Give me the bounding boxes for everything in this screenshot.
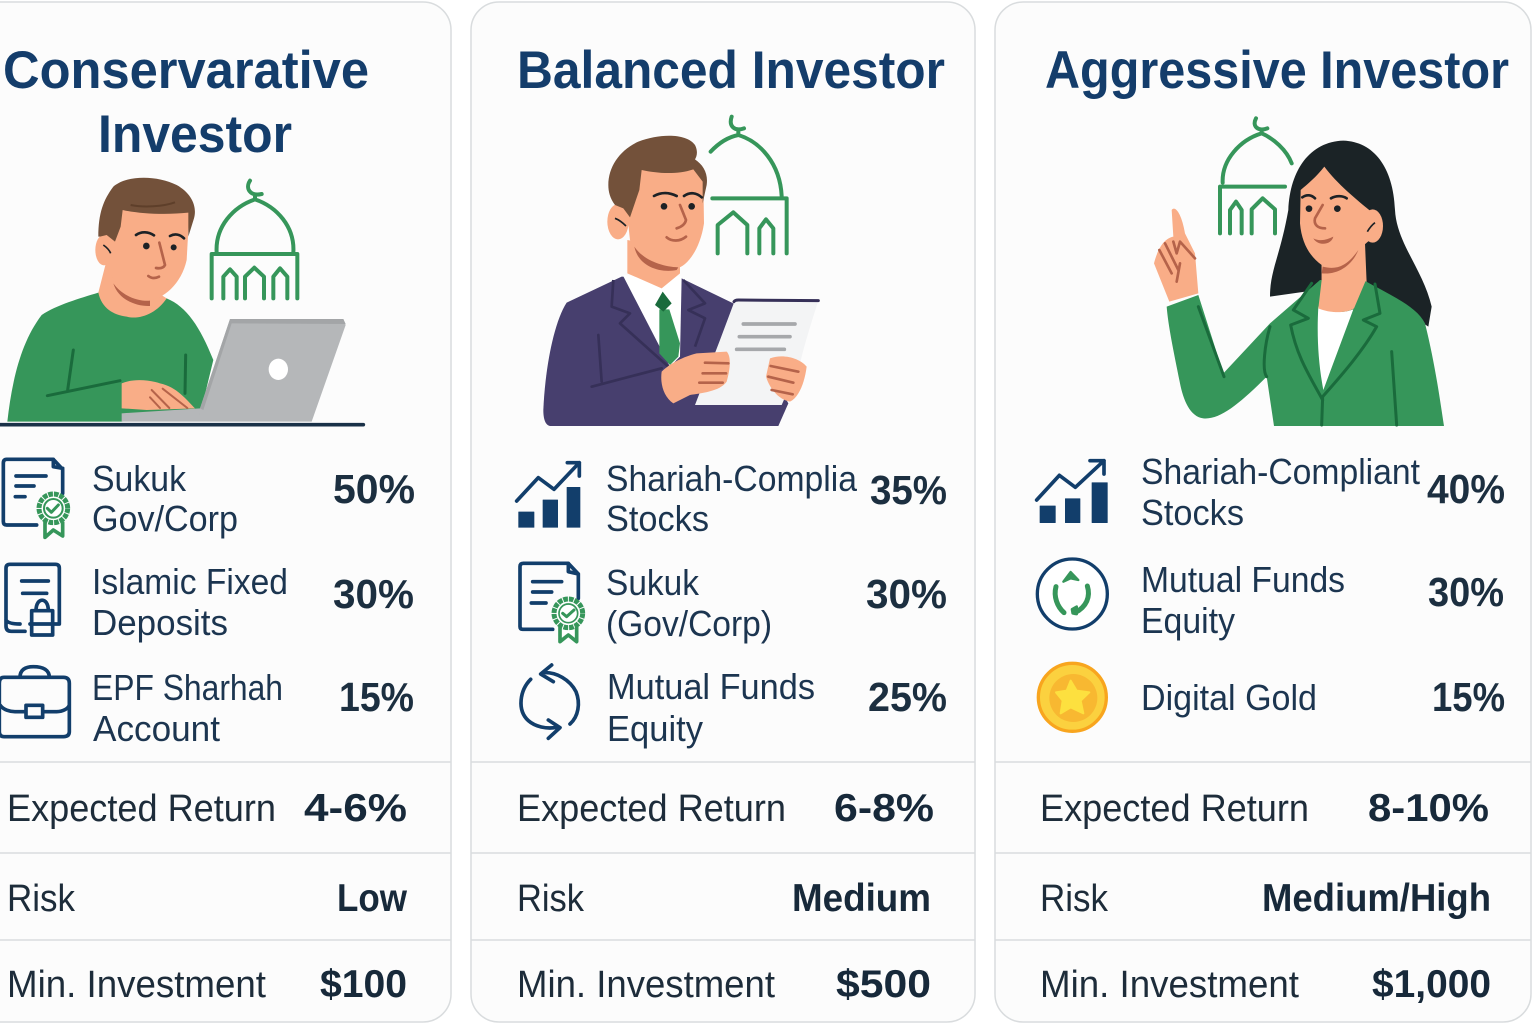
row: expected return	[517, 787, 934, 830]
icon: growth chart	[517, 463, 580, 527]
icon: refresh arrows	[521, 665, 578, 738]
label: digital gold: Digital Gold	[1141, 677, 1317, 718]
heading: conservative investor: Conservarative	[3, 41, 369, 100]
icon: growth chart	[1037, 461, 1107, 523]
label: islamic fixed deposits: Islamic Fixed	[92, 561, 288, 602]
row: risk: Medium/High	[1262, 877, 1491, 920]
row: risk	[1040, 877, 1491, 920]
label: mutual funds equity: Mutual Funds	[607, 666, 815, 707]
heading: balanced investor: Balanced Investor	[517, 41, 945, 100]
illustration: woman in green blazer pointing with mosque	[1154, 118, 1444, 426]
label: mutual funds equity: Equity	[1141, 600, 1235, 641]
icon: certified document	[3, 459, 68, 537]
label: shariah-compliant stocks: Stocks	[606, 498, 709, 539]
row: risk: Risk	[517, 878, 585, 920]
panel: aggressive investor	[995, 2, 1531, 1022]
value: 35%: 35%	[870, 467, 947, 513]
value: 40%: 40%	[1427, 466, 1505, 512]
heading: conservative investor	[3, 41, 369, 164]
icon: locked book	[6, 564, 59, 635]
row: min investment: Min. Investment	[517, 964, 775, 1006]
row: risk: Risk	[1040, 878, 1109, 920]
label: shariah-compliant stocks	[606, 458, 858, 539]
label: sukuk: Sukuk	[92, 458, 187, 499]
illustration: man in suit with document and mosque	[543, 117, 818, 426]
row: risk: Low	[337, 877, 408, 920]
value: 30%: 30%	[333, 571, 414, 617]
label: shariah-compliant stocks: Shariah-Compliant	[1141, 451, 1420, 492]
row: expected return: Expected Return	[517, 788, 786, 830]
allocation list	[517, 458, 947, 749]
label: sukuk gov corp: Sukuk	[606, 562, 700, 603]
label: shariah-compliant stocks: Stocks	[1141, 492, 1244, 533]
icon: circular recycle	[1037, 559, 1107, 629]
illustration: man at laptop with mosque	[0, 178, 363, 425]
icon: briefcase	[0, 667, 69, 737]
row: risk: Medium	[792, 877, 931, 920]
value: 15%: 15%	[339, 674, 414, 720]
row: expected return: Expected Return	[7, 788, 276, 830]
row: min investment	[7, 963, 407, 1006]
label: mutual funds equity	[1141, 559, 1345, 641]
allocation list	[0, 458, 415, 749]
heading: conservative investor: Investor	[98, 105, 292, 164]
allocation list	[1037, 451, 1505, 731]
label: epf shariah account: Account	[93, 708, 220, 749]
row: expected return: Expected Return	[1040, 788, 1309, 830]
value: 25%: 25%	[868, 674, 947, 720]
label: sukuk gov corp: (Gov/Corp)	[606, 603, 772, 644]
label: mutual funds equity: Equity	[607, 708, 703, 749]
row: risk: Risk	[7, 878, 76, 920]
row: min investment: $500	[836, 963, 931, 1006]
label: sukuk: Gov/Corp	[92, 498, 238, 539]
label: shariah-compliant stocks: Shariah-Complia	[606, 458, 858, 499]
row: min investment: $1,000	[1372, 963, 1491, 1006]
icon: certified document	[520, 563, 583, 642]
row: risk	[517, 877, 931, 920]
row: expected return	[1040, 787, 1489, 830]
value: 30%: 30%	[1428, 569, 1504, 615]
row: min investment: Min. Investment	[1040, 964, 1299, 1006]
row: min investment: Min. Investment	[7, 964, 266, 1006]
label: sukuk gov corp	[606, 562, 772, 644]
row: expected return: 8-10%	[1368, 787, 1489, 830]
value: 15%: 15%	[1432, 674, 1505, 720]
label: islamic fixed deposits: Deposits	[92, 602, 228, 643]
row: expected return: 6-8%	[834, 787, 934, 830]
label: mutual funds equity	[607, 666, 815, 749]
row: min investment	[1040, 963, 1491, 1006]
label: mutual funds equity: Mutual Funds	[1141, 559, 1345, 600]
row: expected return	[7, 787, 407, 830]
label: sukuk	[92, 458, 238, 539]
panel: balanced investor	[471, 2, 975, 1022]
label: epf shariah account: EPF Sharhah	[92, 667, 283, 708]
row: min investment: $100	[320, 963, 407, 1006]
label: epf shariah account	[92, 667, 283, 749]
label: shariah-compliant stocks	[1141, 451, 1420, 533]
value: 50%: 50%	[333, 466, 415, 512]
row: min investment	[517, 963, 931, 1006]
row: expected return: 4-6%	[304, 787, 407, 830]
icon: gold coin	[1038, 663, 1106, 731]
label: islamic fixed deposits	[92, 561, 288, 643]
row: risk	[7, 877, 408, 920]
value: 30%: 30%	[866, 571, 947, 617]
panel: conservative investor	[0, 2, 451, 1022]
